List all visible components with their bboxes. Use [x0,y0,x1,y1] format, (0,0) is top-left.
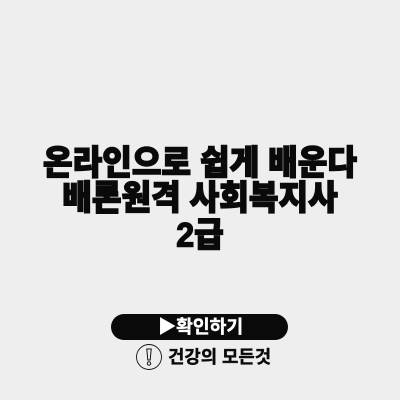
title: 2급 [176,216,224,254]
title: 온라인으로 쉽게 배운다 [43,144,357,182]
brand: icon and name [136,344,271,370]
confirm button: ▶확인하기 [158,317,243,337]
icon: exclamation circle [136,344,162,370]
confirm button [111,314,288,340]
title: 배론원격 사회복지사 [62,179,338,217]
brand name: 건강의 모든것 [168,347,271,367]
title [43,144,358,254]
